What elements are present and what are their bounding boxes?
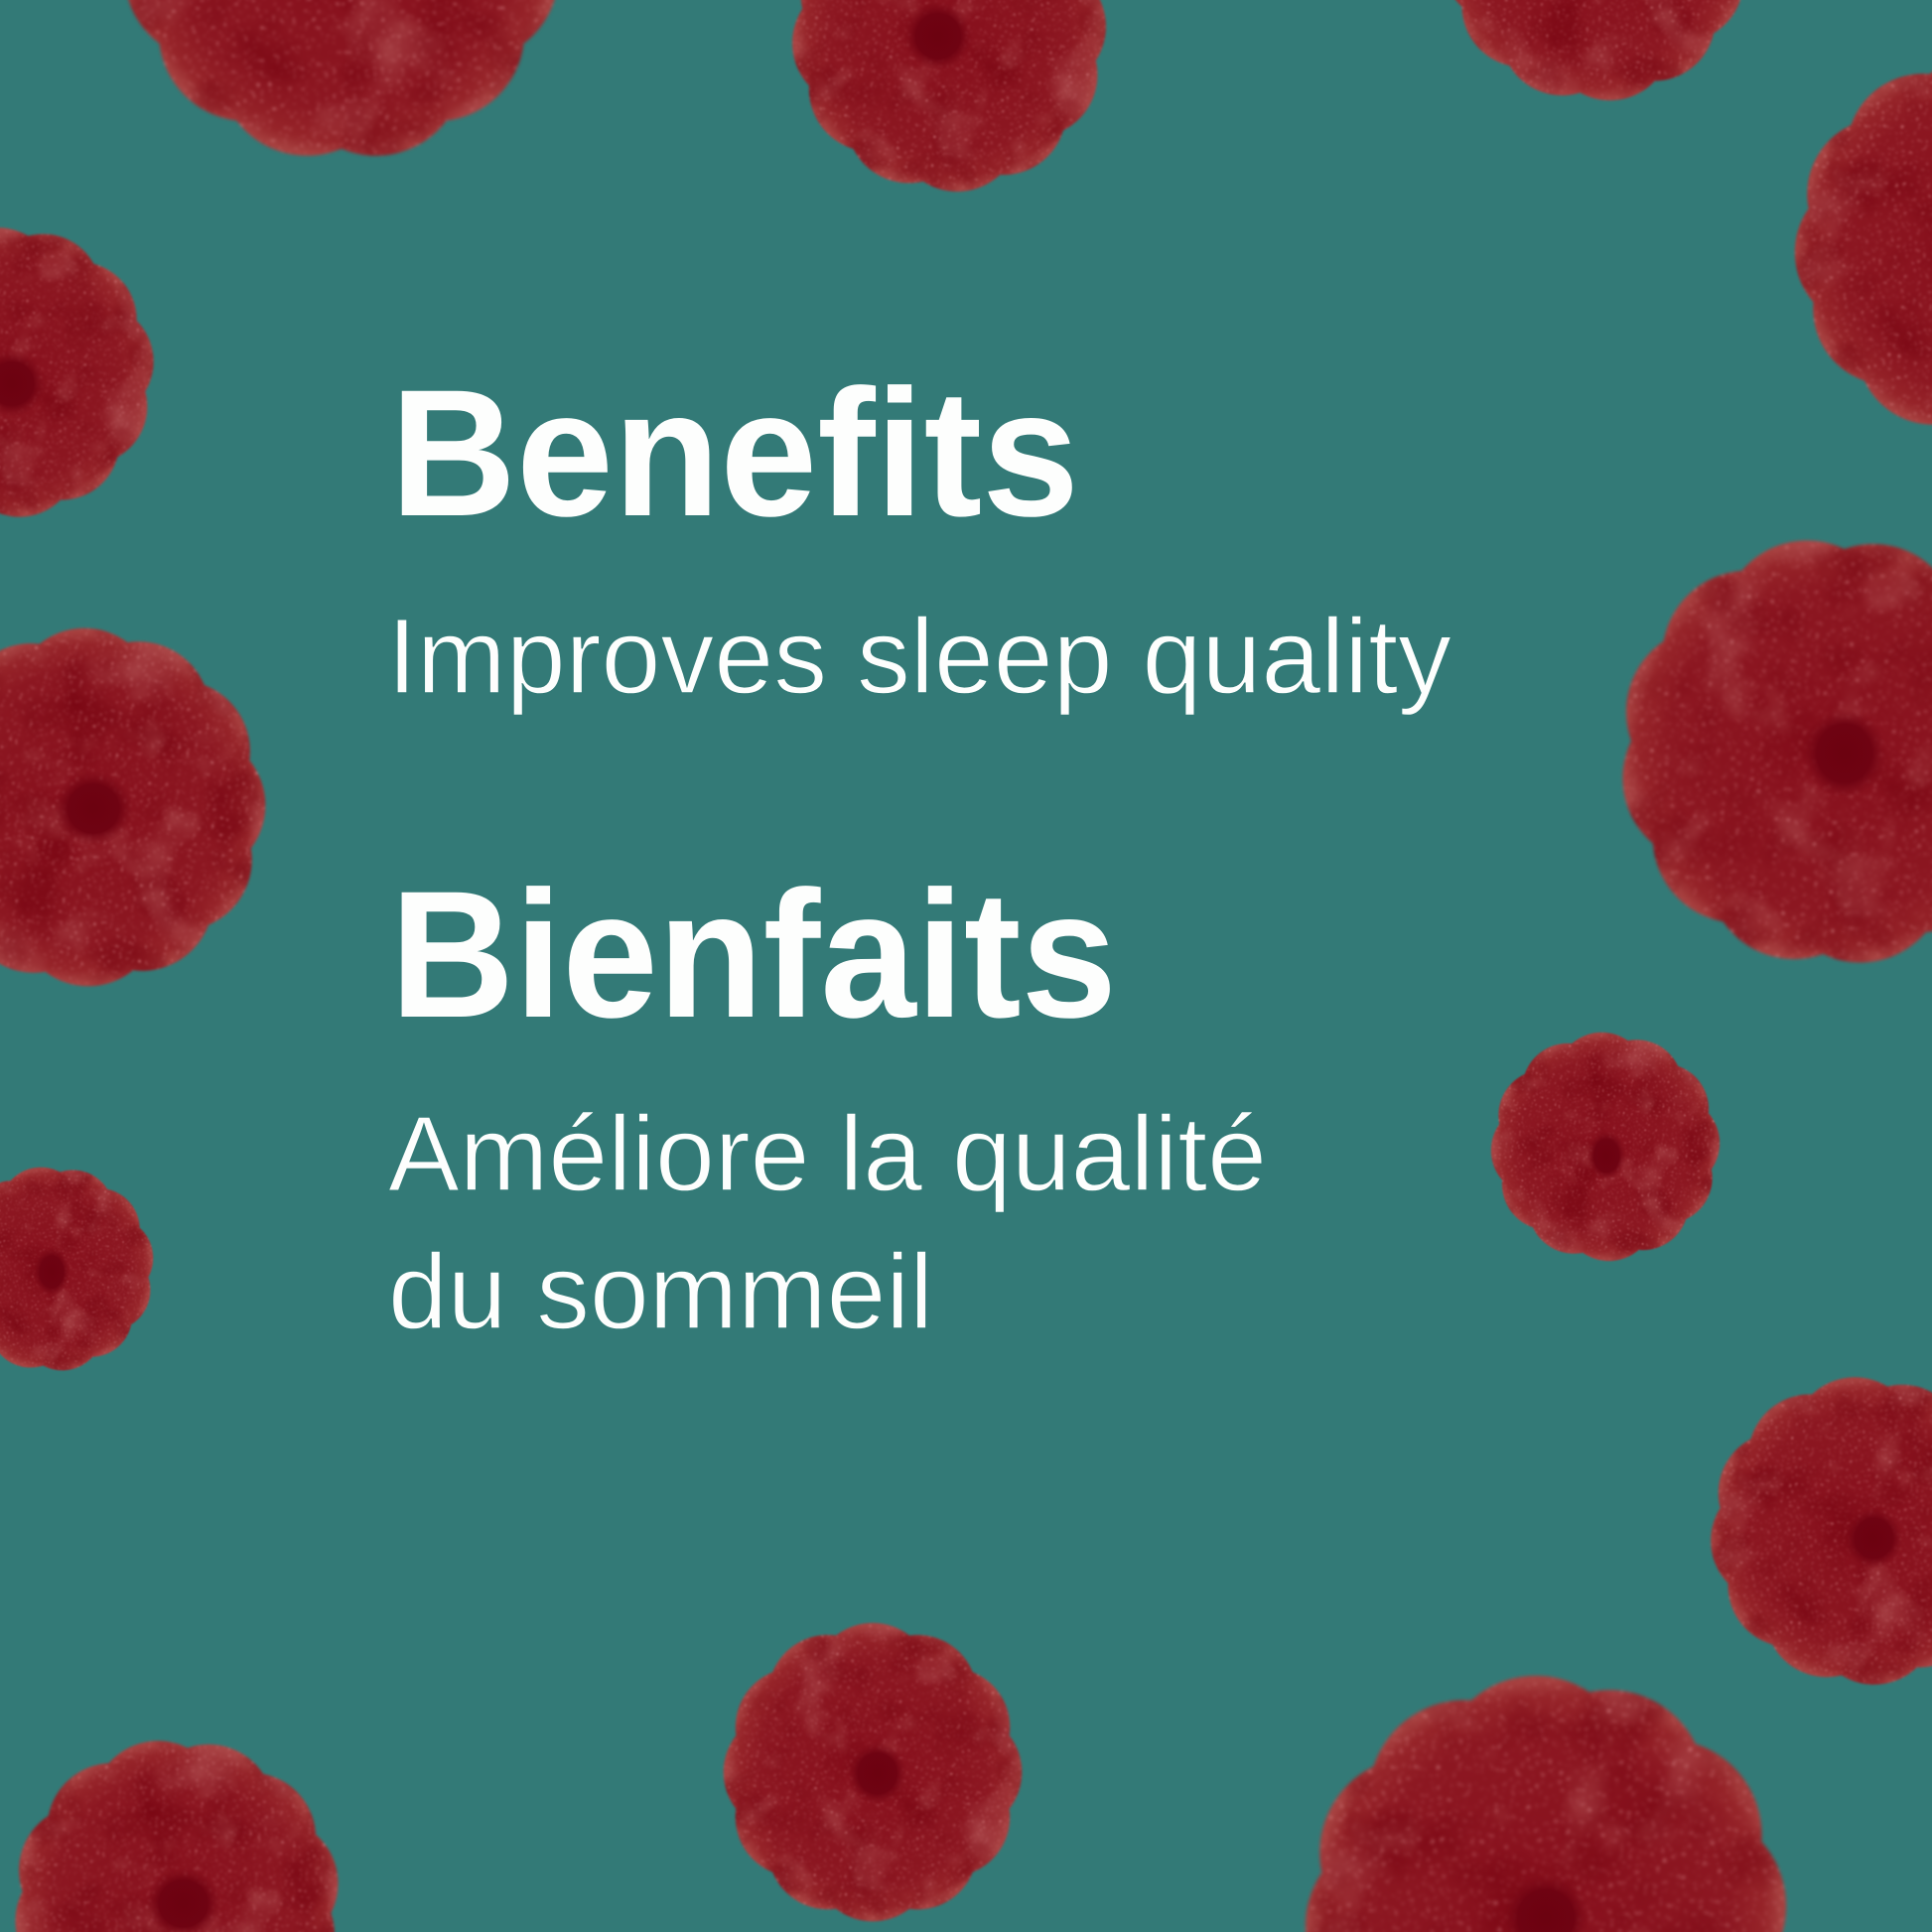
text: Améliore la qualité du sommeil: Améliore la qualité <box>388 1093 1267 1213</box>
gummy: right small <box>1472 1014 1738 1280</box>
gummy: right lower <box>1692 1358 1932 1704</box>
text: Améliore la qualité du sommeil <box>388 1093 1267 1351</box>
gummy: right large <box>1613 531 1932 972</box>
gummy: bottom left <box>6 1731 347 1932</box>
gummy: top centre <box>770 0 1128 213</box>
gummy: left middle <box>0 595 299 1020</box>
heading: Benefits: Benefits <box>390 351 1079 554</box>
text: Améliore la qualité du sommeil: du sommeil <box>388 1231 933 1351</box>
heading: Bienfaits: Bienfaits <box>390 853 1117 1055</box>
gummy: top left <box>124 0 559 156</box>
gummy: left lower <box>0 1160 161 1378</box>
text: Improves sleep quality: Improves sleep quality <box>387 596 1451 716</box>
gummy: top right <box>1430 0 1761 113</box>
gummy: bottom right <box>1269 1639 1823 1932</box>
gummy: bottom centre <box>694 1593 1051 1932</box>
gummy: left upper <box>0 211 170 533</box>
gummy: right upper <box>1763 24 1932 469</box>
